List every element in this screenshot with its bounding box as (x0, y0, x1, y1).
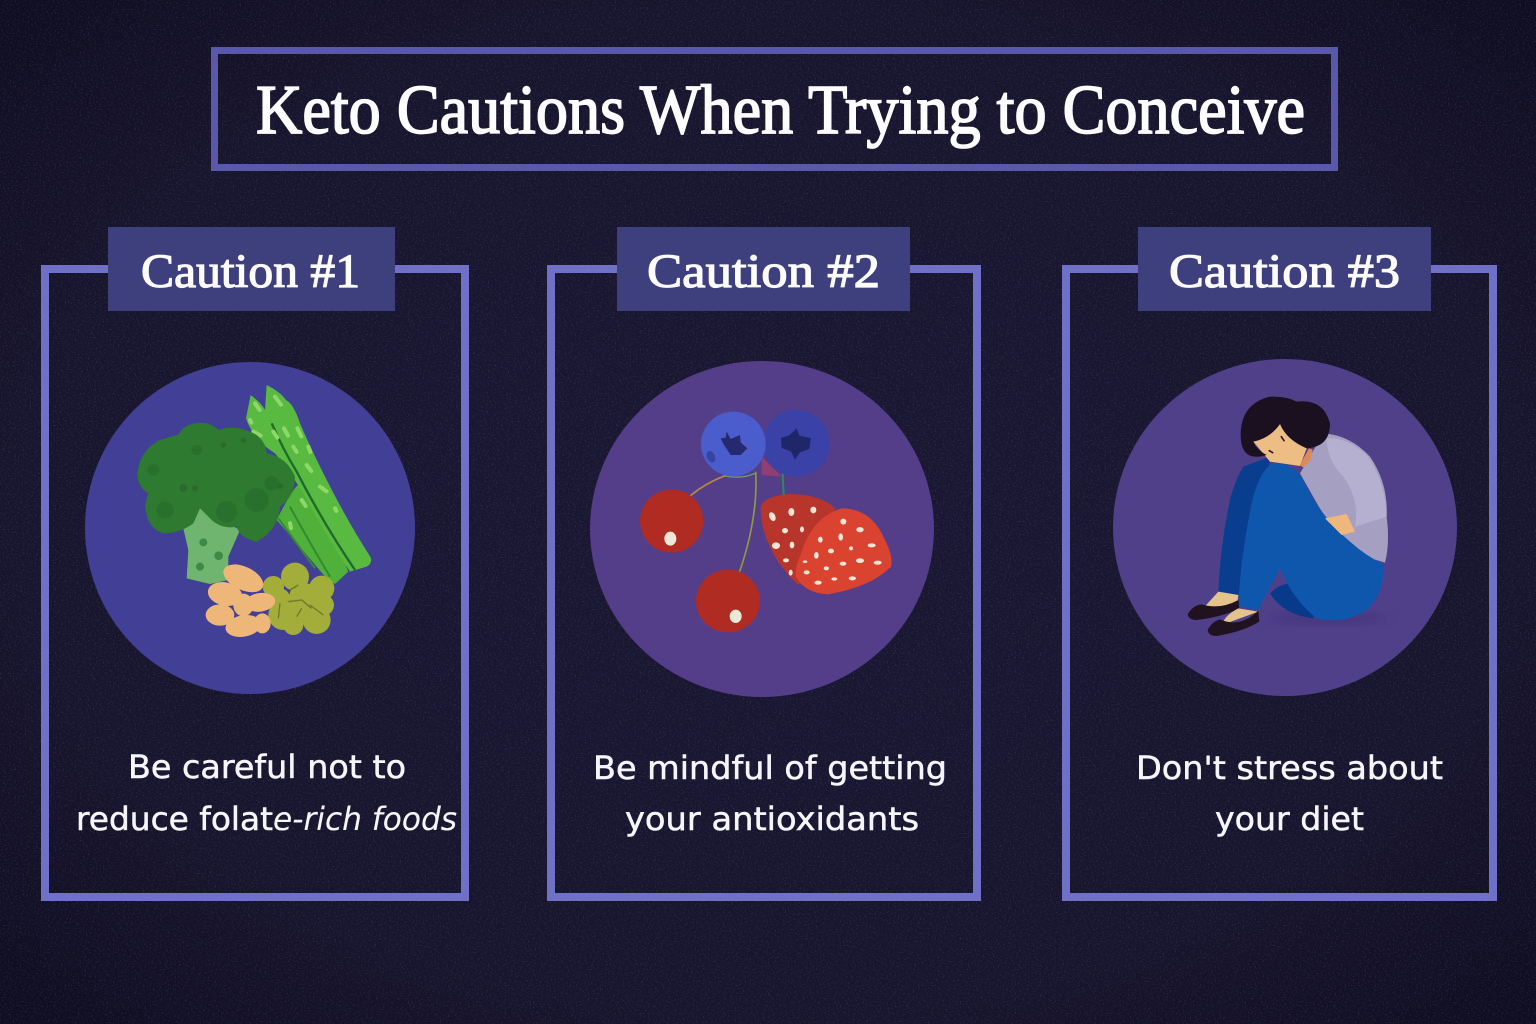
title (214, 50, 1334, 168)
text: caution 2: your antioxidants (625, 800, 919, 838)
text: caution 1: reduce folat (76, 800, 273, 838)
text: caution 1: Be careful not to (128, 748, 406, 786)
text: caution 3: your diet (1215, 800, 1364, 838)
heading: caution 1 (108, 227, 395, 311)
text: caution 3 (1136, 749, 1443, 838)
panel: caution 3 (1066, 227, 1493, 897)
heading: caution 1: Caution #1 (141, 245, 360, 298)
title: Keto Cautions When Trying to Conceive (256, 72, 1305, 149)
heading: caution 2 (617, 227, 910, 311)
text: caution 1: e-rich foods (273, 800, 457, 838)
text: caution 3: Don't stress about (1136, 749, 1443, 787)
text: caution 1 (76, 748, 457, 838)
heading: caution 3 (1138, 227, 1431, 311)
illustration: berries and cherries (590, 361, 934, 697)
text: caution 2 (593, 749, 947, 838)
panel: caution 2 (551, 227, 977, 897)
illustration: stressed woman hugging knees (1113, 359, 1457, 696)
heading: caution 2: Caution #2 (647, 245, 880, 298)
heading: caution 3: Caution #3 (1169, 245, 1400, 298)
illustration: broccoli, asparagus and nuts (85, 362, 415, 694)
panel: caution 1 (45, 227, 465, 897)
text: caution 2: Be mindful of getting (593, 749, 947, 787)
